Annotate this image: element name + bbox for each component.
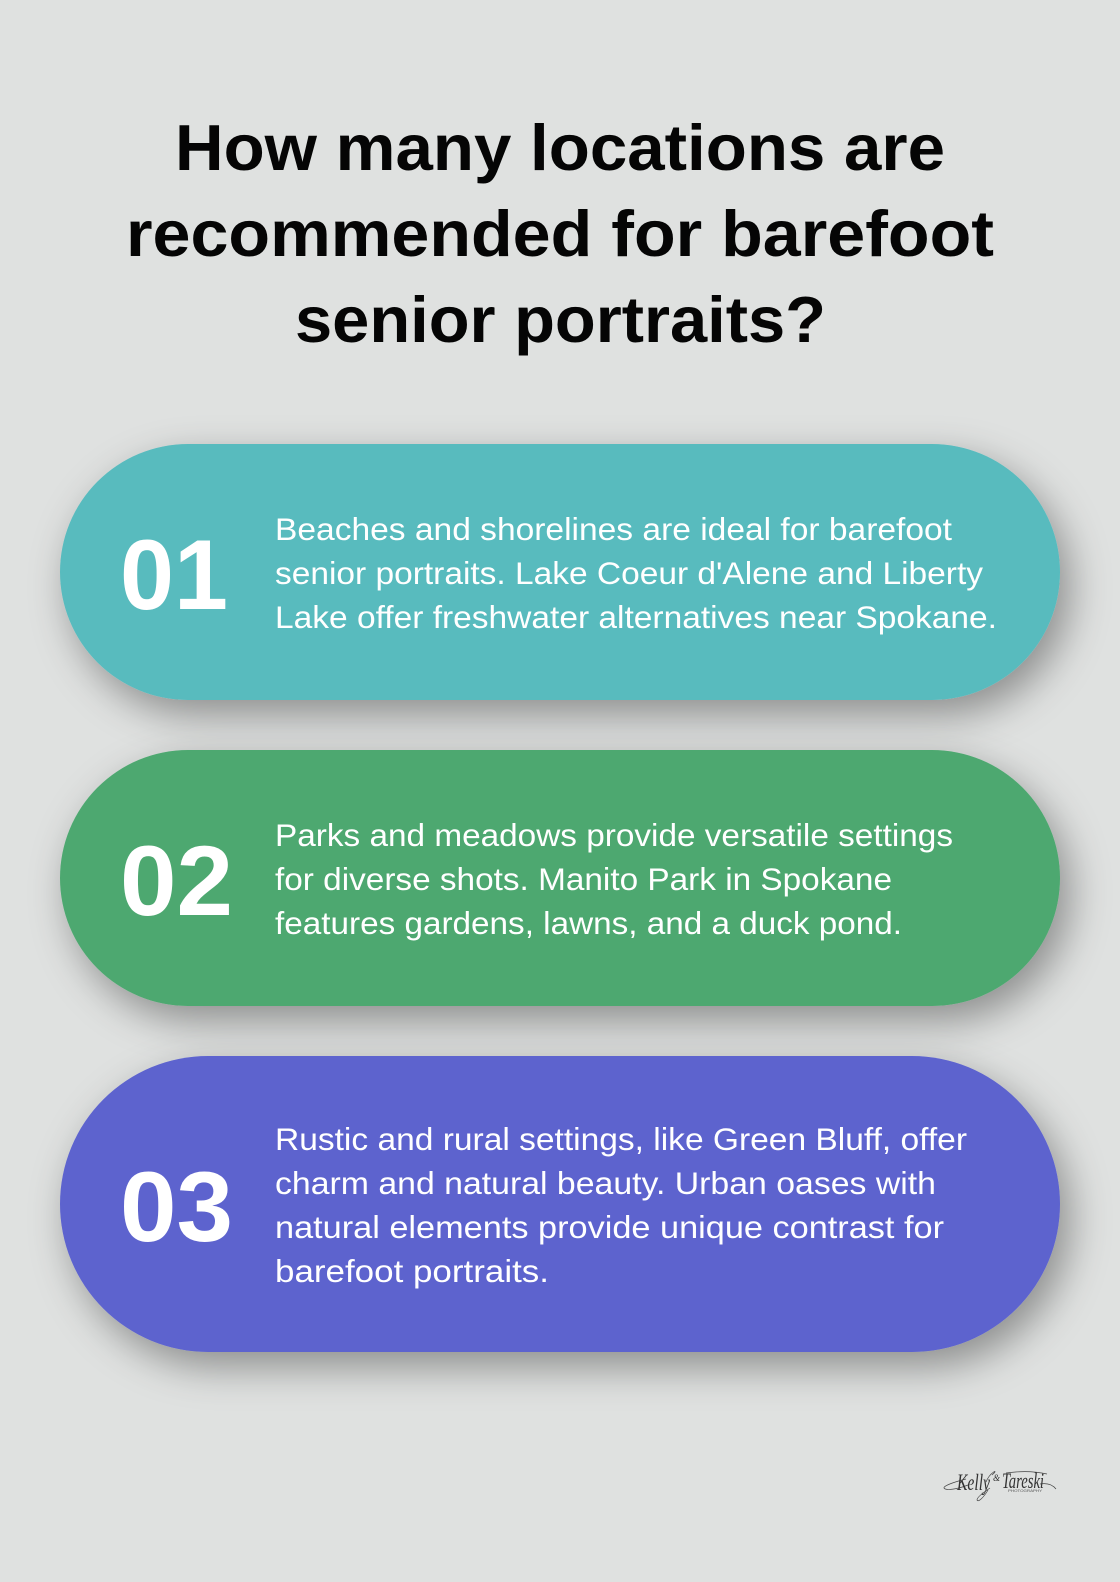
panel: step 03 rustic and urban settings (60, 1056, 1060, 1352)
description 03: charm and natural beauty. Urban oases with (275, 1165, 936, 1201)
description 02: Parks and meadows provide versatile settings (275, 817, 953, 853)
number 01: 01 (120, 519, 228, 630)
logo: signature: PHOTOGRAPHY (1008, 1489, 1043, 1493)
description 01: Beaches and shorelines are ideal for barefoot (275, 511, 952, 547)
number 03: 03 (120, 1151, 233, 1262)
title: senior portraits? (295, 283, 826, 356)
purple pill background (60, 1056, 1060, 1352)
title: How many locations are (175, 111, 945, 184)
panel: step 02 parks and meadows (60, 750, 1060, 1006)
teal pill background (60, 444, 1060, 700)
logo: signature (944, 1468, 1056, 1501)
logo: signature: & (993, 1473, 1000, 1483)
logo: signature: Kelly (956, 1470, 991, 1495)
description 03: Rustic and rural settings, like Green Bluff, offer (275, 1121, 967, 1157)
number 02: 02 (120, 825, 233, 936)
title: recommended for barefoot (126, 197, 994, 270)
description 03 (275, 1121, 967, 1289)
description 01: senior portraits. Lake Coeur d'Alene and Liberty (275, 555, 983, 591)
description 01: Lake offer freshwater alternatives near Spokane. (275, 599, 997, 635)
description 03: natural elements provide unique contrast for (275, 1209, 944, 1245)
logo: signature: Tareski (1002, 1468, 1044, 1493)
description 02: features gardens, lawns, and a duck pond. (275, 905, 902, 941)
green pill background (60, 750, 1060, 1006)
title (126, 111, 994, 356)
description 01 (275, 511, 997, 635)
description 02: for diverse shots. Manito Park in Spokane (275, 861, 892, 897)
description 03: barefoot portraits. (275, 1253, 549, 1289)
panel: step 01 beaches and shorelines (60, 444, 1060, 700)
description 02 (275, 817, 953, 941)
